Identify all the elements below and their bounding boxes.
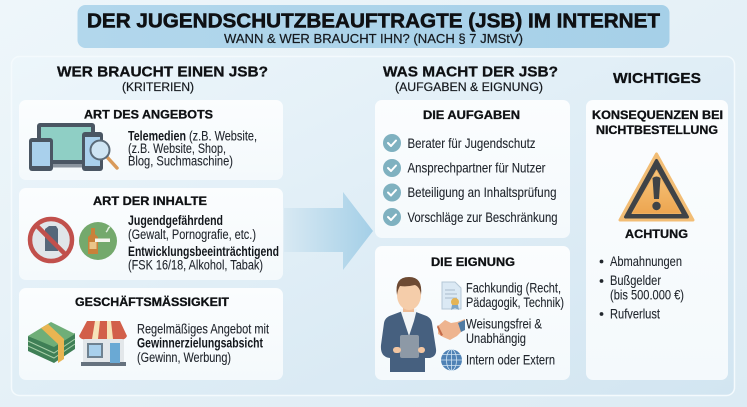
list: konsequenzen: (bis 500.000 €) (610, 286, 684, 302)
text: telemedien: Blog, Suchmaschine) (128, 154, 233, 168)
icon: devices with magnifier (29, 123, 117, 171)
icon: money stack (28, 322, 75, 363)
text: geschäft (137, 322, 269, 365)
heading: geschäftsmässigkeit: GESCHÄFTSMÄSSIGKEIT (75, 294, 230, 309)
text: inhalte: Jugendgefährdend (128, 213, 223, 228)
icon: certificate (442, 282, 461, 310)
heading: art des angebots: ART DES ANGEBOTS (84, 108, 213, 122)
text: telemedien: (z.B. Website, (189, 128, 257, 144)
text: eignung (466, 280, 564, 368)
text: inhalte: Entwicklungsbeeinträchtigend (128, 244, 279, 259)
title: DER JUGENDSCHUTZBEAUFTRAGTE (JSB) IM INTERNET (87, 10, 660, 32)
text: geschäft: (Gewinn, Werbung) (137, 350, 231, 365)
text: inhalte: (Gewalt, Pornografie, etc.) (128, 227, 256, 242)
heading: konsequenzen: KONSEQUENZEN BEI (592, 108, 723, 122)
list: aufgaben: Berater für Jugendschutz (408, 135, 536, 151)
icon: handshake (437, 319, 465, 340)
icon: shop (79, 321, 127, 366)
icon: globe (441, 350, 462, 370)
icon: alcohol and tobacco (79, 222, 117, 260)
panel: art des angebots (19, 100, 283, 180)
arrow (284, 192, 373, 270)
text: eignung: Weisungsfrei & (466, 316, 543, 332)
icon: prohibition sign (30, 219, 72, 261)
subtitle: WANN & WER BRAUCHT IHN? (NACH § 7 JMStV) (224, 32, 523, 46)
column heading: was macht der JSB: WAS MACHT DER JSB? (383, 64, 558, 80)
panel: konsequenzen (586, 100, 728, 380)
heading: konsequenzen: NICHTBESTELLUNG (596, 123, 718, 137)
text: eignung: Intern oder Extern (466, 352, 555, 368)
panel: die aufgaben (375, 100, 570, 238)
text: eignung: Fachkundig (Recht, (466, 280, 561, 296)
text: telemedien (128, 128, 257, 168)
text: geschäft: Gewinnerzielungsabsicht (137, 336, 263, 350)
list: aufgaben: Vorschläge zur Beschränkung (408, 209, 558, 225)
heading: art der inhalte: ART DER INHALTE (93, 194, 207, 208)
list: konsequenzen: Abmahnungen (610, 253, 682, 269)
panel: die eignung (375, 246, 570, 380)
list: aufgaben: Ansprechpartner für Nutzer (408, 160, 546, 176)
text: eignung: Pädagogik, Technik) (466, 294, 564, 310)
icon: person with tablet (381, 277, 436, 372)
list: konsequenzen: Rufverlust (610, 306, 660, 322)
column heading: wer braucht einen JSB: WER BRAUCHT EINEN JSB? (57, 64, 268, 80)
list: konsequenzen: Bußgelder (610, 272, 661, 288)
column heading: was macht der JSB (383, 64, 558, 94)
heading: konsequenzen (592, 108, 723, 137)
panel: art der inhalte (19, 188, 283, 280)
column heading: wichtiges: WICHTIGES (613, 70, 701, 87)
column heading: was macht der JSB: (AUFGABEN & EIGNUNG) (395, 82, 543, 94)
heading: die eignung: DIE EIGNUNG (431, 255, 515, 269)
list: aufgaben (383, 134, 558, 226)
text: telemedien: (z.B. Website, Shop, (128, 141, 226, 156)
text: eignung: Unabhängig (466, 330, 526, 346)
heading: die aufgaben: DIE AUFGABEN (423, 108, 520, 122)
list: konsequenzen (600, 253, 684, 322)
icon: warning triangle (620, 154, 693, 220)
panel: geschäftsmässigkeit (19, 288, 283, 380)
text: inhalte: (FSK 16/18, Alkohol, Tabak) (128, 258, 263, 272)
text: telemedien: Telemedien (128, 128, 186, 144)
text: inhalte (128, 213, 279, 272)
column heading: wer braucht einen JSB: (KRITERIEN) (122, 82, 194, 94)
text: geschäft: Regelmäßiges Angebot mit (137, 322, 269, 336)
list: aufgaben: Beteiligung an Inhaltsprüfung (408, 184, 556, 200)
column heading: wer braucht einen JSB (57, 64, 268, 94)
title banner (78, 5, 670, 48)
label: achtung: ACHTUNG (625, 227, 688, 241)
